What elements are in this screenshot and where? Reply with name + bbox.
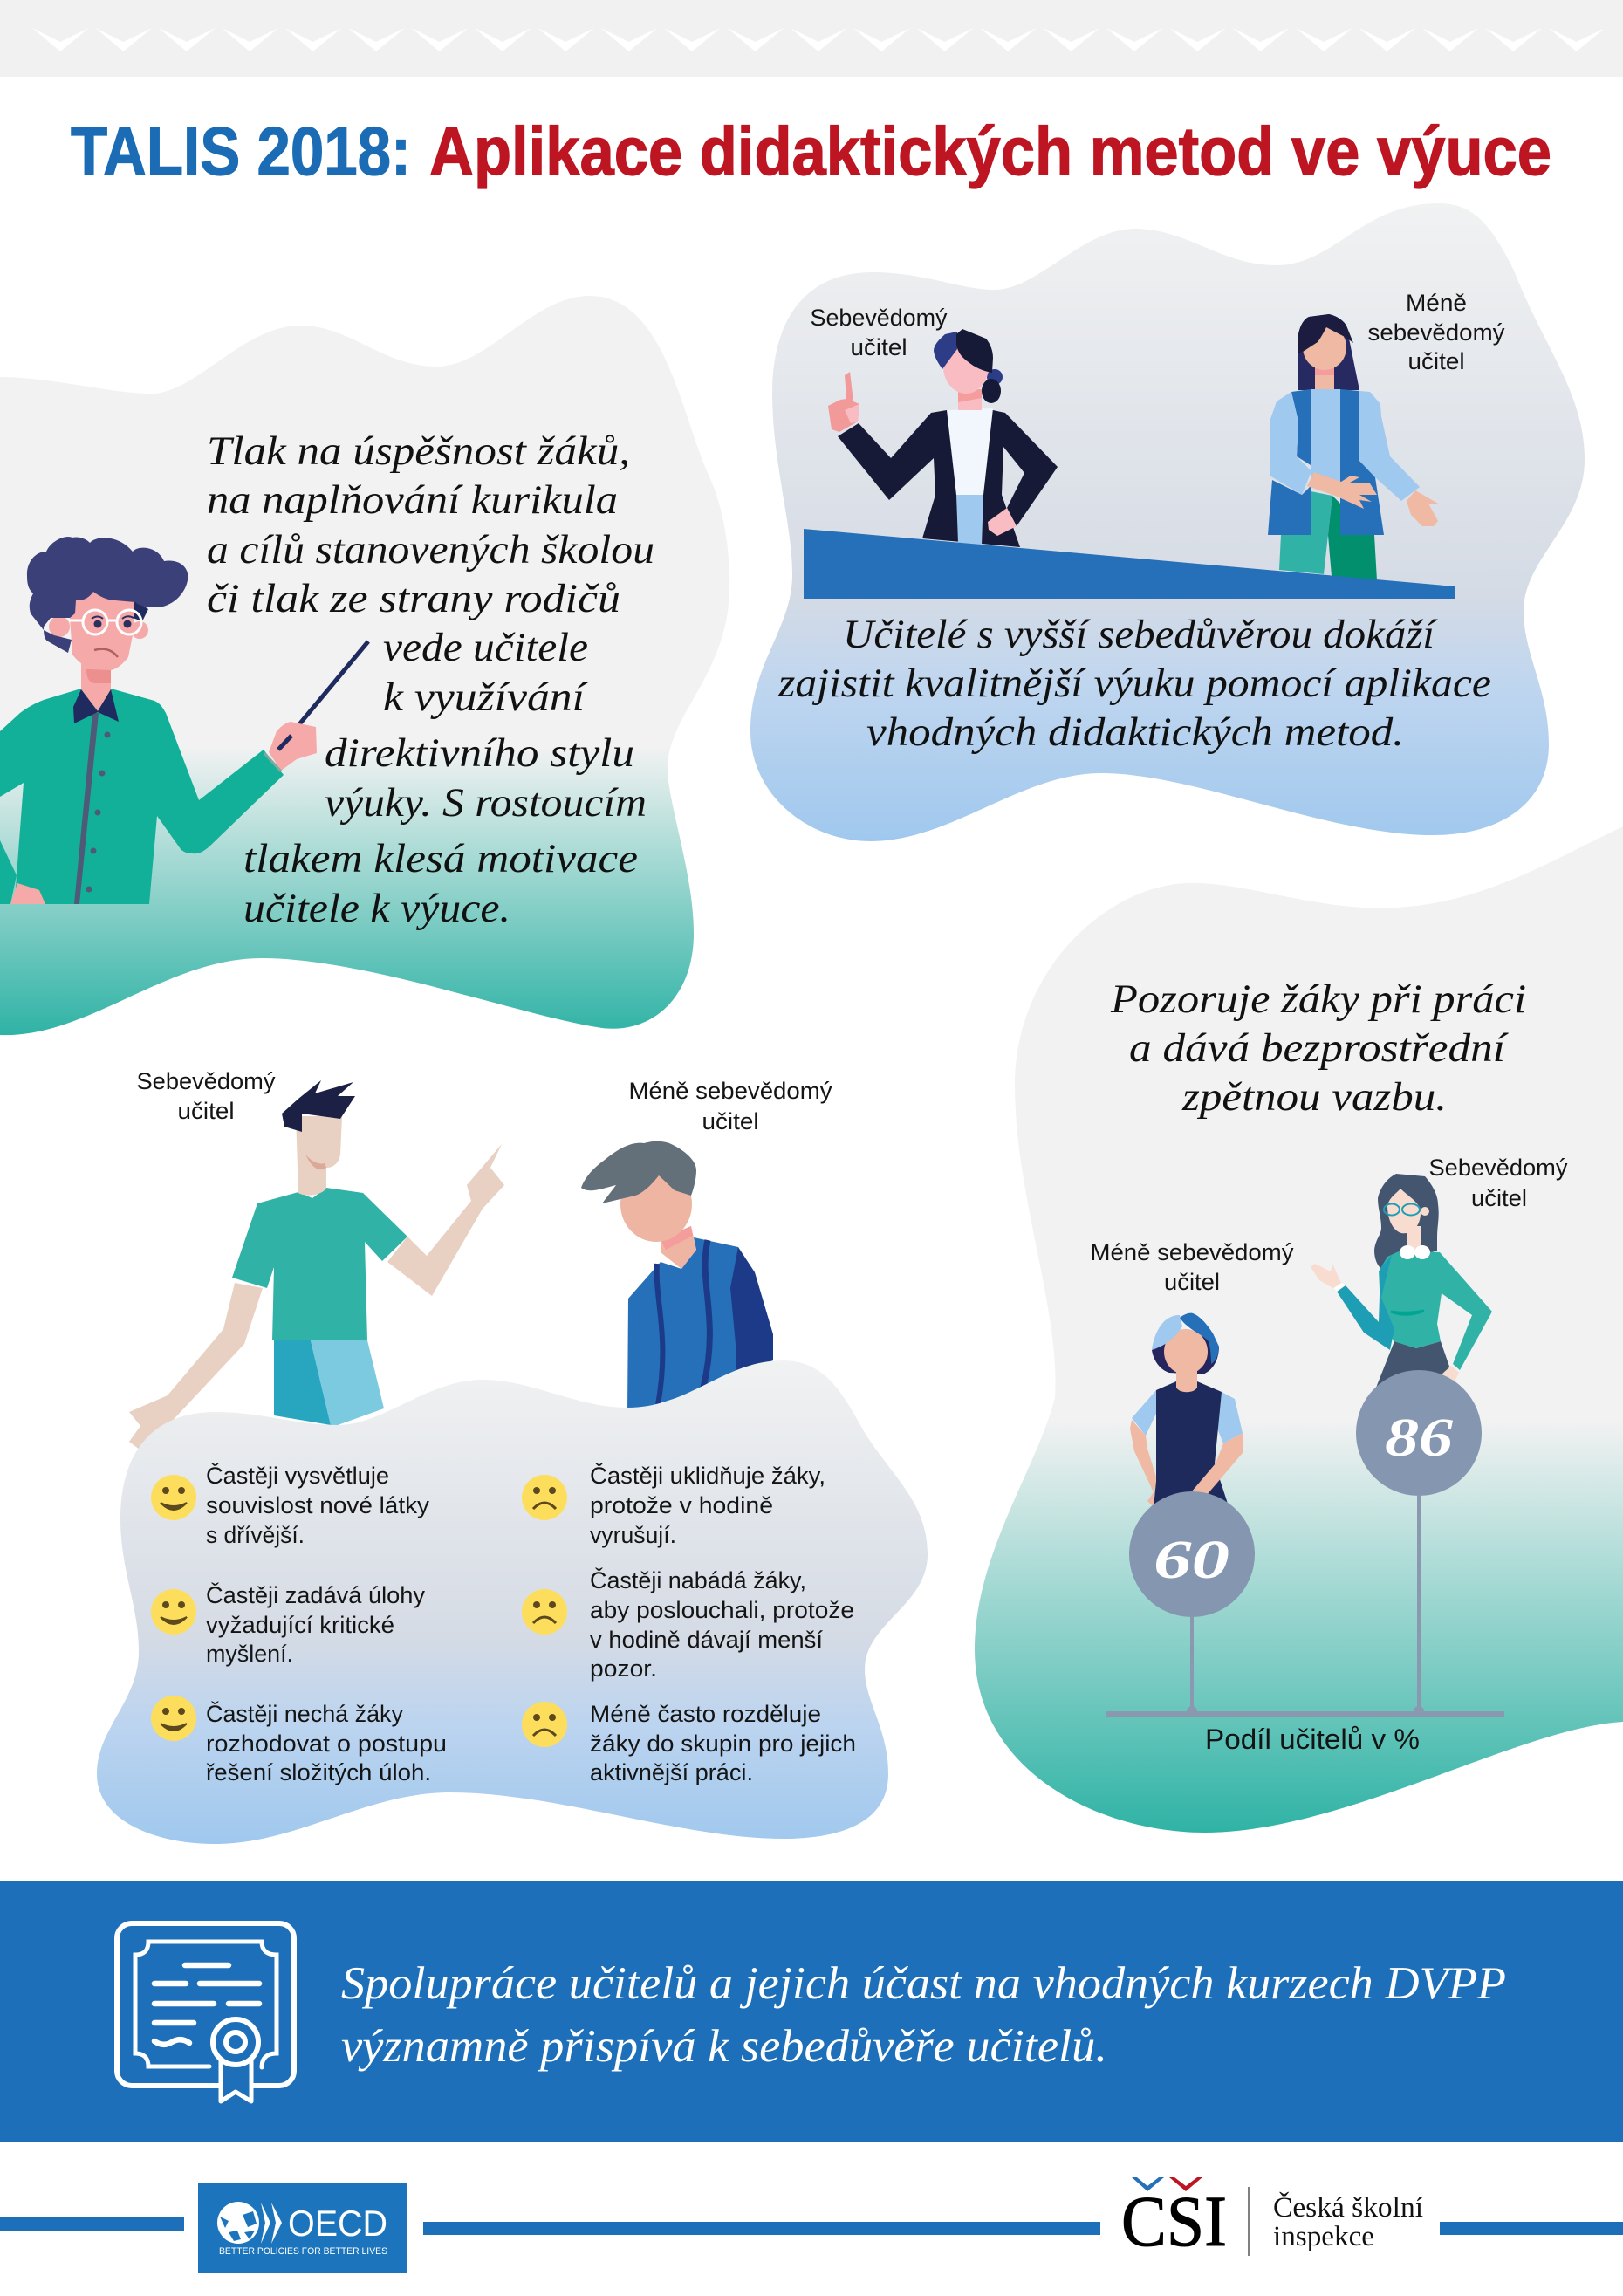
panel: feedback chart bbox=[975, 826, 1623, 1833]
text: less confident 3: aktivnější práci. bbox=[590, 1759, 753, 1785]
icon: smile 2 bbox=[151, 1589, 196, 1635]
top decorative band bbox=[0, 0, 1623, 77]
illustration: teacher with pointer bbox=[0, 537, 368, 904]
value 60: 60 bbox=[1154, 1531, 1229, 1590]
text: banner statement: významně přispívá k sebedůvěře učitelů. bbox=[341, 2021, 1107, 2072]
text: confident 1: Častěji vysvětluje bbox=[206, 1462, 389, 1489]
label: less confident teacher: Méně bbox=[1406, 290, 1467, 316]
ramp bbox=[804, 529, 1455, 599]
label: less confident teacher: Méně sebevědomý bbox=[1091, 1239, 1294, 1265]
text: feedback heading: zpětnou vazbu. bbox=[1181, 1074, 1447, 1120]
text: less confident 1: protože v hodině bbox=[590, 1492, 773, 1518]
text: pressure paragraph bbox=[207, 428, 654, 931]
text: confident 1: s dřívější. bbox=[206, 1522, 305, 1548]
icon: certificate bbox=[117, 1923, 294, 2101]
text: less confident 3 bbox=[590, 1701, 856, 1785]
label: less confident teacher: Méně sebevědomý bbox=[628, 1078, 832, 1104]
text: confident 1: souvislost nové látky bbox=[206, 1492, 430, 1518]
illustration: less confident woman teacher bbox=[1268, 314, 1438, 580]
logo: Česká školní inspekce: inspekce bbox=[1273, 2221, 1374, 2252]
illustration: less confident teacher bbox=[1130, 1313, 1243, 1507]
label: less confident teacher bbox=[1091, 1239, 1294, 1295]
text: less confident 1: vyrušují. bbox=[590, 1522, 676, 1548]
text: less confident 1: Častěji uklidňuje žáky, bbox=[590, 1462, 825, 1489]
icon: frown 1 bbox=[522, 1475, 567, 1520]
icon: smile 1 bbox=[151, 1475, 196, 1520]
text: pressure paragraph: či tlak ze strany rodičů bbox=[207, 576, 620, 621]
icon: smile 3 bbox=[151, 1696, 196, 1741]
text: confident 3: řešení složitých úloh. bbox=[206, 1759, 431, 1785]
chevron: blue bbox=[1132, 2177, 1164, 2191]
icon: frown 3 bbox=[522, 1702, 567, 1747]
illustration: confident teacher with glasses bbox=[1311, 1174, 1492, 1396]
value 86: 86 bbox=[1385, 1408, 1453, 1468]
text: less confident 2: aby poslouchali, protože bbox=[590, 1597, 854, 1623]
panel: behaviour comparison bbox=[97, 1068, 928, 1844]
label: confident teacher: Sebevědomý bbox=[810, 305, 948, 331]
label: less confident teacher: učitel bbox=[1164, 1269, 1220, 1295]
text: higher confidence statement: vhodných didaktických metod. bbox=[866, 709, 1404, 755]
text: less confident 2: Častěji nabádá žáky, bbox=[590, 1566, 806, 1593]
text: pressure paragraph: Tlak na úspěšnost žáků, bbox=[207, 428, 630, 474]
label: confident teacher bbox=[810, 305, 948, 360]
text: feedback heading bbox=[1110, 977, 1526, 1120]
text: pressure paragraph: k využívání bbox=[383, 675, 588, 720]
label: confident teacher: učitel bbox=[178, 1098, 234, 1124]
text: confident 2: vyžadující kritické bbox=[206, 1612, 394, 1638]
text: less confident 2 bbox=[590, 1566, 854, 1682]
text: feedback heading: a dává bezprostřední bbox=[1129, 1025, 1509, 1071]
label: confident teacher: učitel bbox=[850, 334, 907, 360]
label: confident teacher: učitel bbox=[1471, 1185, 1527, 1211]
text: pressure paragraph: a cílů stanovených školou bbox=[207, 527, 654, 572]
text: pressure paragraph: výuky. S rostoucím bbox=[325, 780, 647, 826]
logo: Česká školní inspekce: Česká školní bbox=[1273, 2190, 1423, 2224]
text: higher confidence statement bbox=[777, 612, 1491, 755]
text: confident 3: rozhodovat o postupu bbox=[206, 1731, 447, 1757]
value 86 bbox=[1356, 1370, 1482, 1496]
panel: pressure on teachers bbox=[0, 296, 729, 1035]
text: confident 2: Častěji zadává úlohy bbox=[206, 1581, 425, 1608]
label: less confident teacher: učitel bbox=[702, 1108, 759, 1134]
text: higher confidence statement: zajistit kvalitnější výuku pomocí aplikace bbox=[777, 661, 1491, 706]
text: pressure paragraph: vede učitele bbox=[383, 625, 588, 670]
text: higher confidence statement: Učitelé s vyšší sebedůvěrou dokáží bbox=[843, 612, 1438, 657]
label: less confident teacher bbox=[1368, 290, 1505, 374]
text: pressure paragraph: direktivního stylu bbox=[325, 730, 634, 776]
logo: OECD bbox=[198, 2183, 407, 2273]
banner: cooperation and training bbox=[0, 1881, 1623, 2142]
text: confident 1 bbox=[206, 1462, 430, 1548]
footer lines bbox=[0, 2217, 1623, 2235]
label: confident teacher: Sebevědomý bbox=[1429, 1155, 1568, 1181]
label: confident teacher: Sebevědomý bbox=[136, 1068, 276, 1094]
logo: OECD: OECD bbox=[288, 2203, 387, 2244]
illustration: confident woman teacher bbox=[828, 329, 1058, 547]
label: less confident teacher: učitel bbox=[1408, 348, 1464, 374]
text: feedback heading: Pozoruje žáky při práci bbox=[1110, 977, 1526, 1022]
illustration: less confident male teacher bbox=[581, 1141, 773, 1414]
text: confident 2 bbox=[206, 1581, 425, 1667]
label: less confident teacher bbox=[628, 1078, 832, 1134]
chevron: red bbox=[1169, 2177, 1202, 2191]
axis label: Podíl učitelů v % bbox=[1205, 1724, 1420, 1755]
text: banner statement: Spolupráce učitelů a jejich účast na vhodných kurzech DVPP bbox=[341, 1958, 1506, 2009]
icon: frown 2 bbox=[522, 1589, 567, 1635]
logo: OECD: BETTER POLICIES FOR BETTER LIVES bbox=[219, 2246, 387, 2257]
text: confident 3: Častěji nechá žáky bbox=[206, 1700, 403, 1727]
label: confident teacher bbox=[136, 1068, 276, 1124]
text: pressure paragraph: učitele k výuce. bbox=[243, 886, 510, 931]
value 60 bbox=[1129, 1491, 1255, 1617]
title: TALIS 2018: bbox=[71, 113, 411, 189]
logo: Česká školní inspekce: CSI bbox=[1121, 2181, 1227, 2261]
logo: Česká školní inspekce bbox=[1121, 2177, 1423, 2261]
text: banner statement bbox=[341, 1958, 1506, 2072]
text: less confident 3: Méně často rozděluje bbox=[590, 1701, 821, 1727]
text: pressure paragraph: tlakem klesá motivace bbox=[243, 836, 638, 881]
lollipop chart bbox=[1106, 1370, 1504, 1717]
text: confident 3 bbox=[206, 1700, 447, 1785]
text: less confident 2: v hodině dávají menší bbox=[590, 1627, 823, 1653]
text: less confident 1 bbox=[590, 1462, 825, 1548]
text: pressure paragraph: na naplňování kurikula bbox=[207, 477, 618, 523]
label: confident teacher bbox=[1429, 1155, 1568, 1211]
panel: self-confident teachers and methods bbox=[750, 203, 1585, 841]
illustration: confident male teacher bbox=[129, 1080, 504, 1452]
text: less confident 2: pozor. bbox=[590, 1655, 657, 1682]
text: confident 2: myšlení. bbox=[206, 1641, 293, 1667]
label: less confident teacher: sebevědomý bbox=[1368, 319, 1505, 346]
text: less confident 3: žáky do skupin pro jejich bbox=[590, 1731, 856, 1757]
